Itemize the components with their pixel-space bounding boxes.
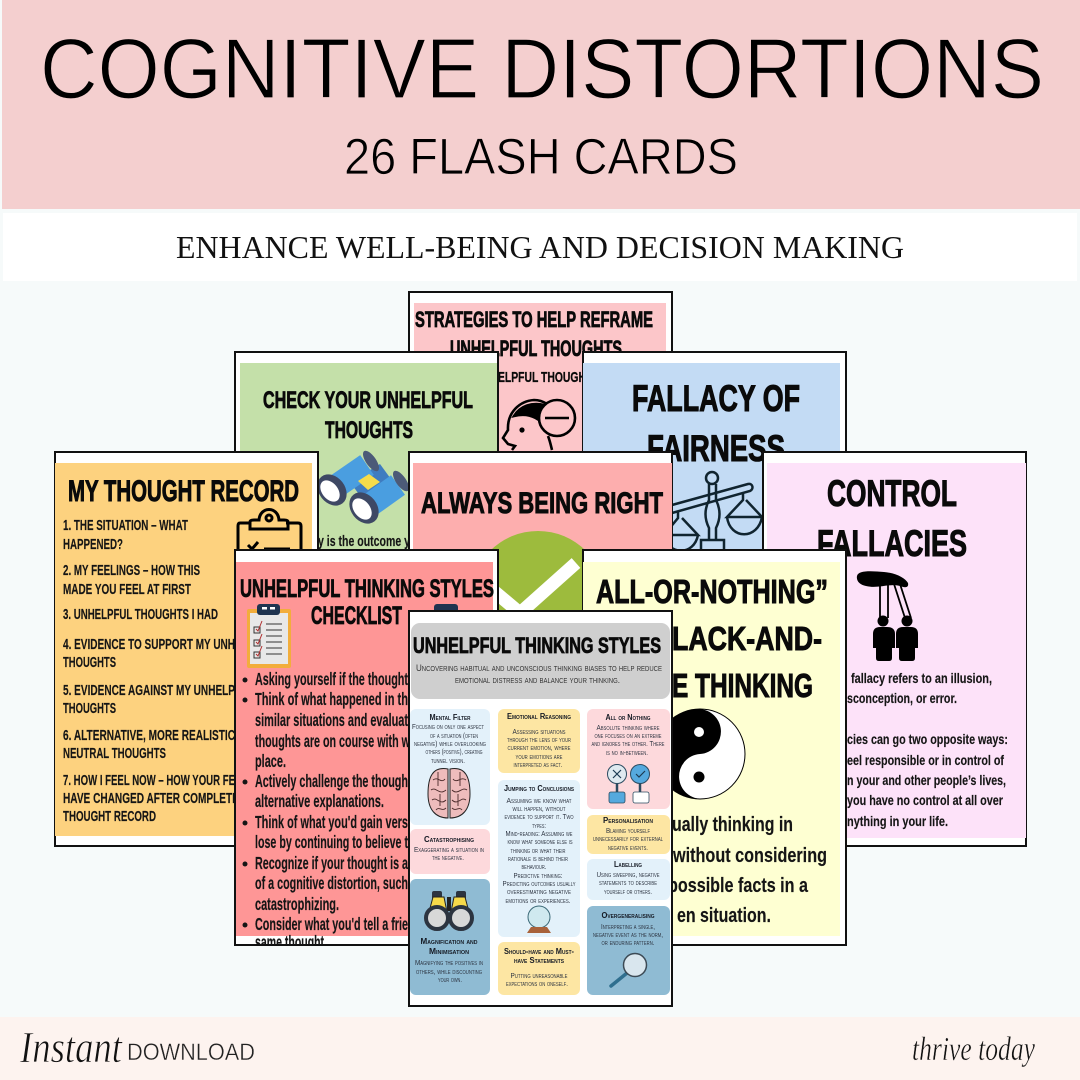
panel: personalisation	[587, 815, 670, 854]
icon: cross and tick signs	[608, 764, 650, 803]
body text: en situation.	[677, 905, 771, 927]
bullet list: Think of what happened in th	[255, 689, 408, 709]
panel: jumping to conclusions: evidence to support it. Two	[504, 812, 574, 821]
numbered list: 7. HOW I FEEL NOW – HOW YOUR FE	[63, 773, 235, 789]
icon: clipboard clip fragment	[434, 604, 458, 610]
numbered list	[63, 518, 235, 825]
panel: jumping to conclusions: Predicting outcomes usually	[502, 879, 576, 888]
panel: all or nothing: Absolute thinking where	[596, 723, 660, 732]
body text: without considering	[672, 845, 827, 867]
body text: n your and other people’s lives,	[847, 772, 1006, 788]
panel: card header: Uncovering habitual and unconscious thinking biases to help reduce	[416, 662, 662, 673]
numbered list: MADE YOU FEEL AT FIRST	[63, 582, 191, 598]
panel: emotional reasoning: current emotion, where	[508, 743, 571, 752]
bullet list: Recognize if your thought is a	[255, 853, 408, 873]
panel: jumping to conclusions: thinking or what their	[510, 846, 566, 855]
body text: fallacy refers to an illusion,	[851, 670, 992, 686]
panel: card header: emotional distress and balance your thinking.	[455, 674, 620, 685]
body text: eel responsible or in control of	[847, 752, 1004, 768]
panel: mental filter: negative) while overlooking	[414, 739, 486, 748]
panel: emotional reasoning: through the lens of your	[507, 735, 571, 744]
tagline band	[3, 213, 1077, 281]
numbered list: 5. EVIDENCE AGAINST MY UNHELP	[63, 683, 235, 699]
panel: emotional reasoning	[498, 709, 580, 773]
bullet list: alternative explanations.	[255, 791, 384, 811]
header banner	[2, 0, 1080, 209]
footer band	[0, 1017, 1080, 1080]
panel: should-have and must-have statements: have Statements	[514, 956, 565, 965]
panel: mental filter	[410, 709, 490, 825]
icon: blue binoculars	[319, 450, 408, 524]
panel: jumping to conclusions: will happen, without	[512, 804, 566, 813]
panel: magnification and minimisation: Magnifying the positives in	[415, 958, 483, 967]
panel: all or nothing: is no in-between.	[606, 748, 648, 757]
panel: should-have and must-have statements: Putting unreasonable	[510, 971, 568, 980]
panel: should-have and must-have statements: expectations on oneself.	[506, 979, 568, 988]
bullet list: Actively challenge the though	[255, 771, 408, 791]
card: always being right	[408, 451, 673, 610]
heading: checklist	[240, 578, 494, 624]
panel: emotional reasoning: Emotional Reasoning	[507, 712, 571, 721]
panel: personalisation: negative events.	[608, 843, 648, 852]
body text	[847, 670, 1008, 829]
numbered list: THOUGHTS	[63, 655, 116, 671]
panel: labelling: yourself or others.	[604, 887, 652, 896]
body text fragment: y is the outcome y	[318, 533, 410, 550]
panel: all or nothing	[587, 709, 670, 809]
heading: control fallacies	[818, 480, 966, 557]
heading: control fallacies: FALLACIES	[817, 523, 967, 564]
numbered list: 6. ALTERNATIVE, MORE REALISTIC	[63, 728, 235, 744]
heading: all-or-nothing	[596, 573, 828, 704]
panel: should-have and must-have statements: Should-have and Must-	[504, 947, 574, 956]
card: all-or-nothing	[583, 550, 846, 945]
icon: yin yang	[673, 708, 746, 800]
numbered list: 2. MY FEELINGS – HOW THIS	[63, 563, 200, 579]
panel: mental filter: Mental Filter	[430, 713, 471, 722]
heading: all-or-nothing: ALL-OR-NOTHING”	[596, 573, 828, 610]
numbered list: NEUTRAL THOUGHTS	[63, 746, 166, 762]
panel: personalisation: unnecessarily for external	[593, 834, 663, 843]
panel: jumping to conclusions: Mind-reading: Assuming we	[506, 829, 573, 838]
panel: jumping to conclusions: Predictive thinking:	[514, 871, 562, 880]
panel: overgeneralising: Overgeneralising	[602, 911, 655, 920]
icon: yellow binoculars	[426, 891, 472, 929]
panel: jumping to conclusions: types:	[532, 821, 546, 830]
body text: ually thinking in	[672, 814, 793, 836]
panel: emotional reasoning: Assessing situations	[512, 727, 566, 736]
panel: labelling: Labelling	[614, 860, 642, 869]
icon: clipboard	[236, 508, 302, 549]
bullet list: Asking yourself if the thought	[255, 669, 408, 689]
title: COGNITIVE DISTORTIONS	[40, 22, 1044, 117]
heading: checklist: CHECKLIST	[311, 602, 402, 630]
bullet list: of a cognitive distortion, such	[255, 873, 408, 893]
numbered list: THOUGHTS	[63, 701, 116, 717]
numbered list: THOUGHT RECORD	[63, 809, 156, 825]
heading: control fallacies: CONTROL	[827, 473, 957, 514]
panel: magnification and minimisation	[410, 879, 490, 995]
icon: green check circle	[492, 531, 584, 610]
panel: overgeneralising	[587, 906, 670, 995]
panel: jumping to conclusions: overestimating negative	[507, 887, 572, 896]
panel: personalisation: Blaming yourself	[606, 826, 650, 835]
panel: mental filter: of a situation (often	[430, 731, 478, 740]
bullet list: same thought.	[255, 932, 327, 952]
panel: jumping to conclusions: Jumping to Conclusions	[504, 784, 575, 793]
panel: catastrophising: the negative.	[432, 853, 464, 862]
panel: personalisation: Personalisation	[603, 816, 653, 825]
panel: all or nothing: one focuses on an extreme	[594, 731, 662, 740]
bullet list: place.	[255, 751, 286, 771]
panel: magnification and minimisation: your own.	[438, 975, 462, 984]
heading: all-or-nothing: LACK-AND-	[672, 620, 822, 657]
footer: instant download: Instant	[19, 1023, 123, 1072]
panel: labelling	[587, 859, 670, 900]
bullet list: similar situations and evaluat	[255, 710, 408, 730]
bullet list: lose by continuing to believe t	[255, 832, 408, 852]
panel: mental filter: Focusing on only one aspect	[412, 722, 484, 731]
heading: check your unhelpful thoughts	[263, 390, 473, 438]
card: fallacy of fairness	[582, 351, 847, 549]
body text: cies can go two opposite ways:	[847, 731, 1008, 747]
heading: strategies: UNHELPFUL THOUGHTS	[450, 336, 622, 361]
panel: mental filter: tunnel vision.	[431, 756, 465, 765]
panel: mental filter: others (positive), creating	[426, 747, 483, 756]
heading: fallacy of fairness: FALLACY OF	[632, 378, 800, 419]
icon: checklist clipboard	[247, 604, 291, 668]
body text: nything in your life.	[847, 813, 948, 829]
heading: strategies	[415, 311, 653, 356]
panel: card header: UNHELPFUL THINKING STYLES	[413, 633, 661, 658]
panel: jumping to conclusions: know what someone else is	[508, 837, 573, 846]
icon: scales	[673, 470, 762, 549]
card: unhelpful thinking styles checklist	[235, 550, 498, 952]
panel: overgeneralising: Interpreting a single,	[601, 922, 655, 931]
icon: brain	[428, 769, 470, 818]
panel: overgeneralising: negative event as the norm,	[593, 930, 663, 939]
subtitle: 26 FLASH CARDS	[344, 128, 738, 185]
card: control fallacies	[763, 452, 1026, 846]
panel: catastrophising: Catastrophising	[424, 835, 474, 844]
heading: fallacy of fairness: FAIRNESS	[647, 428, 785, 469]
icon: crystal ball	[527, 906, 551, 933]
bullet list	[242, 669, 410, 952]
card: unhelpful thinking styles infographic	[409, 611, 672, 1006]
tagline band: ENHANCE WELL-BEING AND DECISION MAKING	[176, 229, 904, 265]
panel: labelling: Using sweeping, negative	[596, 870, 660, 879]
panel: should-have and must-have statements	[498, 942, 580, 995]
panel: all or nothing: All or Nothing	[606, 713, 651, 722]
panel: magnification and minimisation: others, while discounting	[416, 967, 482, 976]
panel: overgeneralising: or enduring pattern.	[602, 938, 654, 947]
heading: strategies: STRATEGIES TO HELP REFRAME	[415, 307, 653, 332]
heading: all-or-nothing: E THINKING	[672, 667, 813, 704]
heading: my thought record: MY THOUGHT RECORD	[68, 475, 299, 508]
card: my thought record	[55, 452, 318, 846]
panel: emotional reasoning: interpreted as fact.	[514, 760, 562, 769]
body text: possible facts in a	[668, 875, 809, 897]
card: check your unhelpful thoughts	[234, 351, 499, 549]
panel: catastrophising: Exaggerating a situation in	[414, 845, 484, 854]
panel: jumping to conclusions: Assuming we know what	[506, 796, 572, 805]
panel: all or nothing: and ignores the other. There	[592, 739, 665, 748]
panel: jumping to conclusions	[498, 780, 580, 937]
panel: emotional reasoning: your emotions are	[516, 752, 563, 761]
body text: sconception, or error.	[847, 690, 957, 706]
body text: you have no control at all over	[847, 792, 1003, 808]
panel: catastrophising	[410, 829, 490, 874]
heading: checklist: UNHELPFUL THINKING STYLES	[240, 575, 494, 603]
bullet list: Consider what you'd tell a frie	[255, 914, 408, 934]
numbered list: HAVE CHANGED AFTER COMPLETI	[63, 791, 235, 807]
heading: always being right: ALWAYS BEING RIGHT	[421, 487, 663, 520]
numbered list: 3. UNHELPFUL THOUGHTS I HAD	[63, 607, 218, 623]
footer: thrive today: thrive today	[912, 1031, 1036, 1068]
panel: magnification and minimisation: Minimisation	[429, 947, 469, 956]
numbered list: 4. EVIDENCE TO SUPPORT MY UNH	[63, 637, 235, 653]
heading: check your unhelpful thoughts: CHECK YOUR UNHELPFUL	[263, 387, 473, 414]
numbered list: HAPPENED?	[63, 537, 123, 553]
panel: jumping to conclusions: emotions or experiences.	[506, 896, 570, 905]
bullet list: catastrophizing.	[255, 894, 339, 914]
body text	[668, 814, 827, 927]
numbered list: 1. THE SITUATION – WHAT	[63, 518, 188, 534]
panel: jumping to conclusions: rationale is behind their	[508, 854, 568, 863]
heading: check your unhelpful thoughts: THOUGHTS	[325, 417, 413, 444]
panel: card header	[411, 623, 670, 699]
panel: labelling: statements to describe	[599, 878, 658, 887]
bullet list: thoughts are on course with w	[255, 731, 410, 751]
panel: jumping to conclusions: behaviour.	[522, 862, 546, 871]
footer: instant download	[19, 1023, 255, 1072]
panel: magnification and minimisation: Magnification and	[420, 937, 478, 946]
heading: fallacy of fairness	[633, 384, 800, 462]
icon: puppet hand	[857, 571, 918, 661]
footer: instant download: DOWNLOAD	[127, 1039, 255, 1066]
icon: head with minus	[503, 400, 575, 450]
card: strategies to help reframe	[408, 291, 673, 451]
icon: magnifying glass	[611, 954, 646, 986]
bullet list: Think of what you'd gain vers	[255, 812, 408, 832]
subheading: ELPFUL THOUGH	[498, 369, 586, 386]
